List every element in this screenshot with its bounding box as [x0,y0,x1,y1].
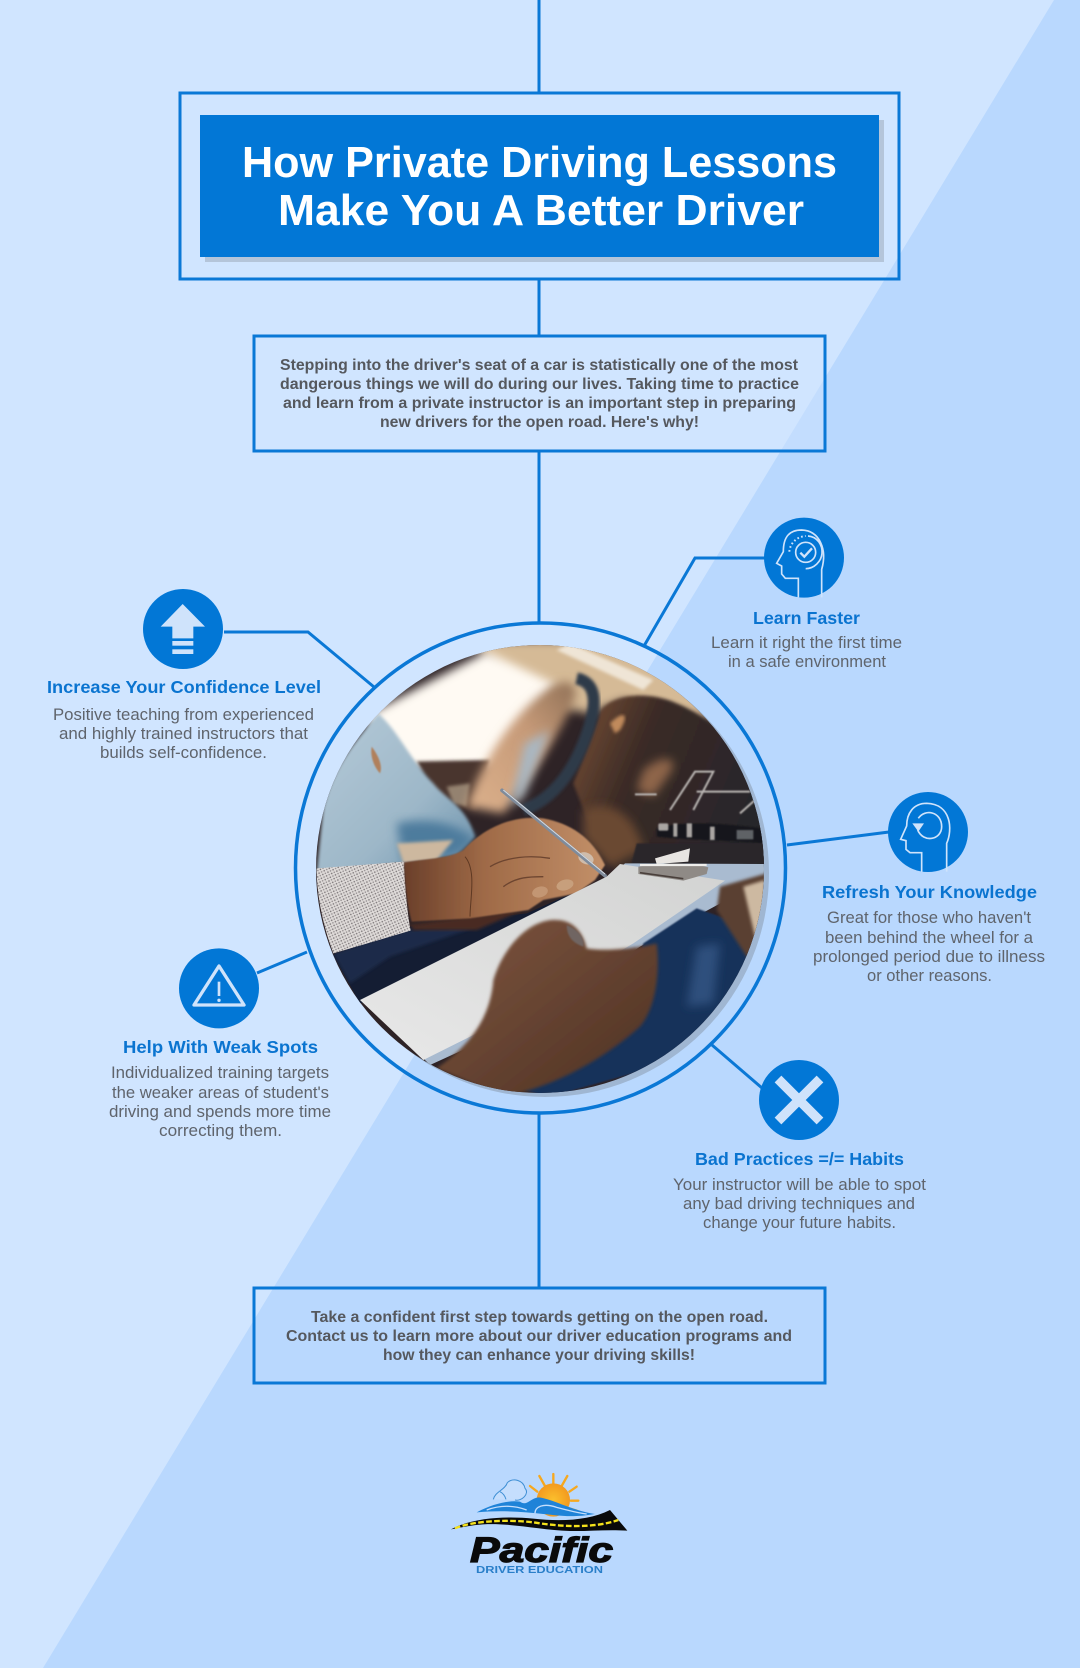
closing call-to-action box: Contact us to learn more about our driver education programs and [286,1328,792,1345]
item: increase confidence [47,589,321,762]
heading: Learn Faster [753,608,860,628]
logo: Pacific Driver Education [451,1474,627,1576]
icon: X mark [759,1060,839,1140]
description: Your instructor will be able to spot [673,1176,926,1194]
item: refresh knowledge [813,792,1045,985]
description: Great for those who haven't [827,909,1031,927]
heading: Bad Practices =/= Habits [695,1149,904,1169]
heading: Increase Your Confidence Level [47,677,321,697]
title panel [180,93,899,279]
photo: instructor writing on clipboard in car [310,640,770,1100]
description: the weaker areas of student's [112,1084,329,1102]
description: change your future habits. [703,1214,896,1232]
intro box: and learn from a private instructor is an important step in preparing [283,395,796,412]
heading: Help With Weak Spots [123,1037,318,1057]
intro box: dangerous things we will do during our lives. Taking time to practice [280,376,799,393]
central photo circle [296,623,786,1113]
closing call-to-action box [254,1288,825,1383]
title text: How Private Driving Lessons [242,138,837,187]
item: learn faster [711,518,902,671]
intro box: Stepping into the driver's seat of a car is statistically one of the most [280,357,798,374]
heading: Refresh Your Knowledge [822,882,1037,902]
logo wordmark: Pacific [470,1531,613,1570]
item: bad practices [673,1060,926,1232]
description: any bad driving techniques and [683,1195,915,1213]
description: Individualized training targets [111,1064,329,1082]
closing call-to-action box: how they can enhance your driving skills! [383,1347,695,1364]
icon: warning triangle [179,948,259,1028]
description: been behind the wheel for a [825,929,1034,947]
description: Learn it right the first time [711,634,902,652]
logo tagline: DRIVER EDUCATION [476,1564,603,1576]
description: Positive teaching from experienced [53,706,314,724]
description: in a safe environment [728,653,886,671]
icon: head with refresh arrow [888,792,968,872]
icon: up arrow [143,589,223,669]
description: correcting them. [159,1122,282,1140]
description: driving and spends more time [109,1103,331,1121]
intro box [254,336,825,451]
closing call-to-action box: Take a confident first step towards getting on the open road. [311,1309,768,1326]
description: and highly trained instructors that [59,725,308,743]
intro box: new drivers for the open road. Here's why! [380,414,699,431]
connector lines [224,0,889,1287]
title text: Make You A Better Driver [278,186,804,235]
item: weak spots [109,948,331,1140]
description: or other reasons. [867,967,992,985]
icon: head with check [764,518,844,598]
description: builds self-confidence. [100,744,267,762]
description: prolonged period due to illness [813,948,1045,966]
